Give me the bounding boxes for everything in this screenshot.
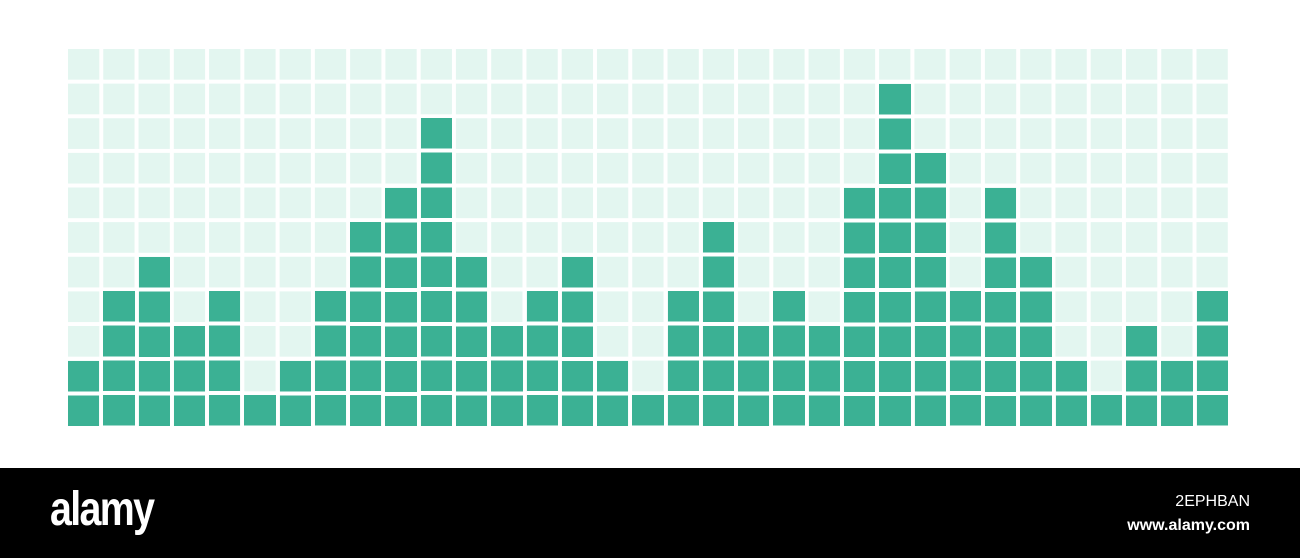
logo text: alamy [50,483,153,536]
image id and url: www.alamy.com [1127,517,1250,534]
image id and url: 2EPHBAN [1175,493,1250,510]
footer bar [0,468,1300,558]
bar chart [68,49,1228,426]
image id and url [1127,493,1250,534]
